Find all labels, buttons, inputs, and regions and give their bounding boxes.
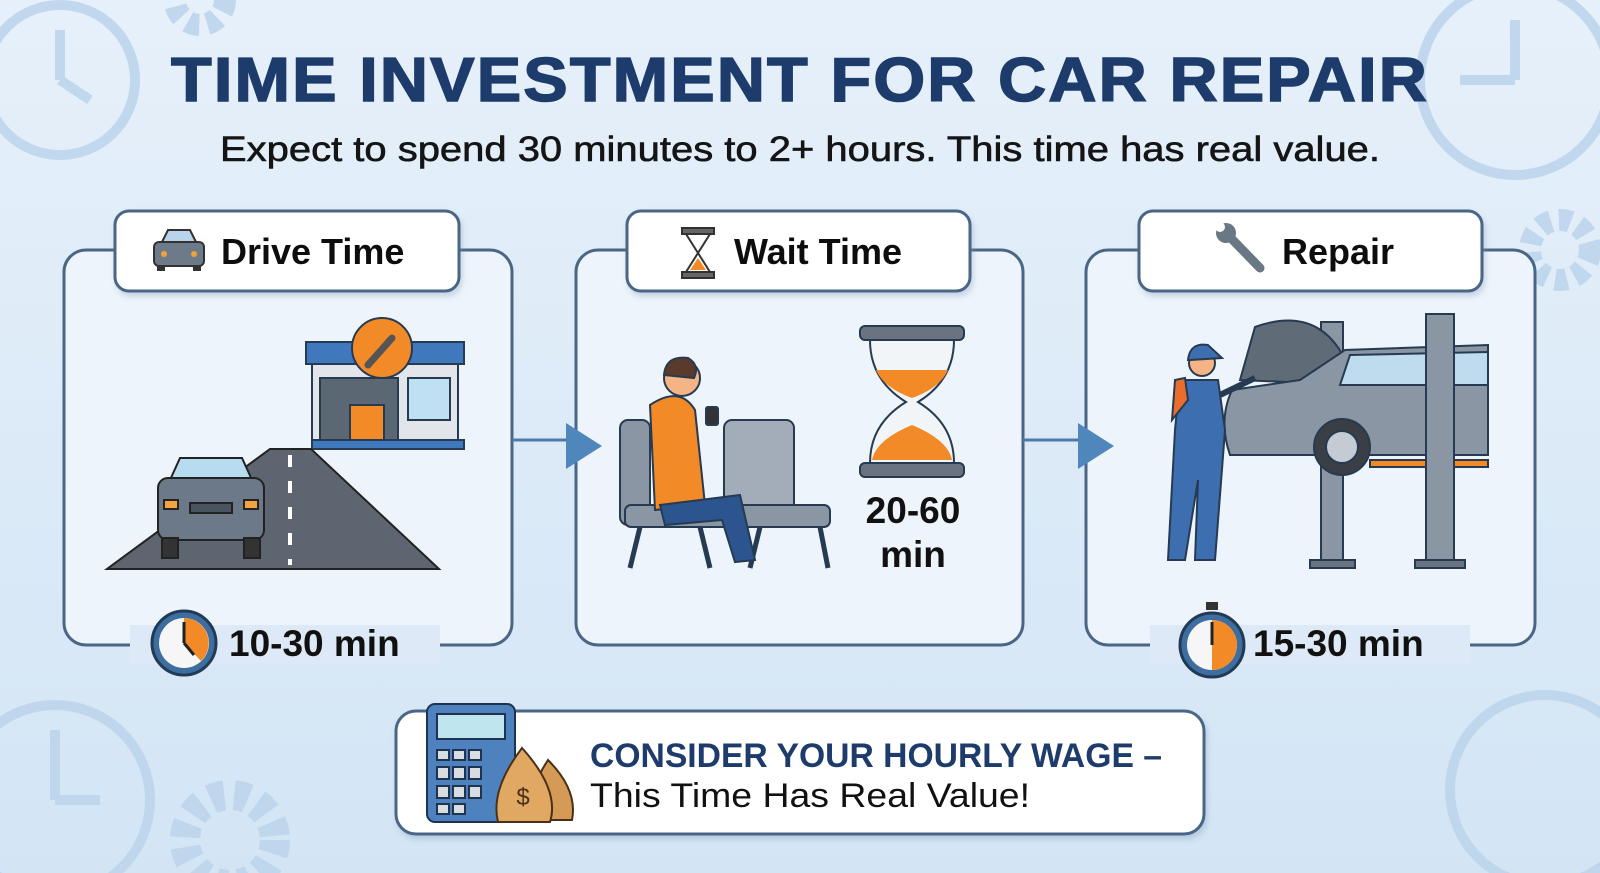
illustration: road — [107, 449, 439, 569]
header tab: drive time: Drive Time — [221, 231, 404, 272]
callout: hourly wage: This Time Has Real Value! — [590, 777, 1030, 815]
duration: wait: 20-60 — [866, 490, 960, 531]
header tab: drive time — [115, 211, 459, 291]
illustration: person waiting on chairs — [620, 358, 830, 568]
illustration: repair shop — [306, 318, 464, 449]
icon: calculator — [427, 704, 515, 822]
title: TIME INVESTMENT FOR CAR REPAIR — [171, 46, 1429, 115]
panel: wait time: min — [880, 534, 946, 575]
header tab: wait time — [627, 211, 970, 291]
header tab: repair — [1139, 211, 1482, 291]
icon: money bags — [496, 748, 573, 822]
icon: clock — [152, 611, 216, 675]
illustration: mechanic — [1168, 345, 1255, 560]
header tab: wait time: Wait Time — [734, 231, 902, 272]
illustration: lift and car — [1224, 314, 1488, 568]
panel: drive time — [64, 211, 512, 675]
icon: stopwatch — [1180, 602, 1244, 677]
callout: hourly wage — [396, 704, 1204, 834]
duration: drive: 10-30 min — [229, 623, 400, 664]
icon: wrench — [1215, 222, 1260, 268]
duration: repair: 15-30 min — [1253, 623, 1424, 664]
icon: money bags: $ — [516, 784, 530, 811]
callout: hourly wage: CONSIDER YOUR HOURLY WAGE – — [590, 737, 1162, 775]
header tab: repair: Repair — [1282, 231, 1394, 272]
illustration: car front — [158, 458, 264, 558]
icon: car — [154, 230, 204, 271]
icon: hourglass small — [682, 228, 714, 278]
subtitle: Expect to spend 30 minutes to 2+ hours. This time has real value. — [220, 130, 1380, 169]
connector arrows — [512, 423, 1114, 469]
illustration: hourglass — [860, 326, 964, 477]
panel: repair — [1086, 211, 1535, 677]
panel: wait time — [576, 211, 1023, 645]
